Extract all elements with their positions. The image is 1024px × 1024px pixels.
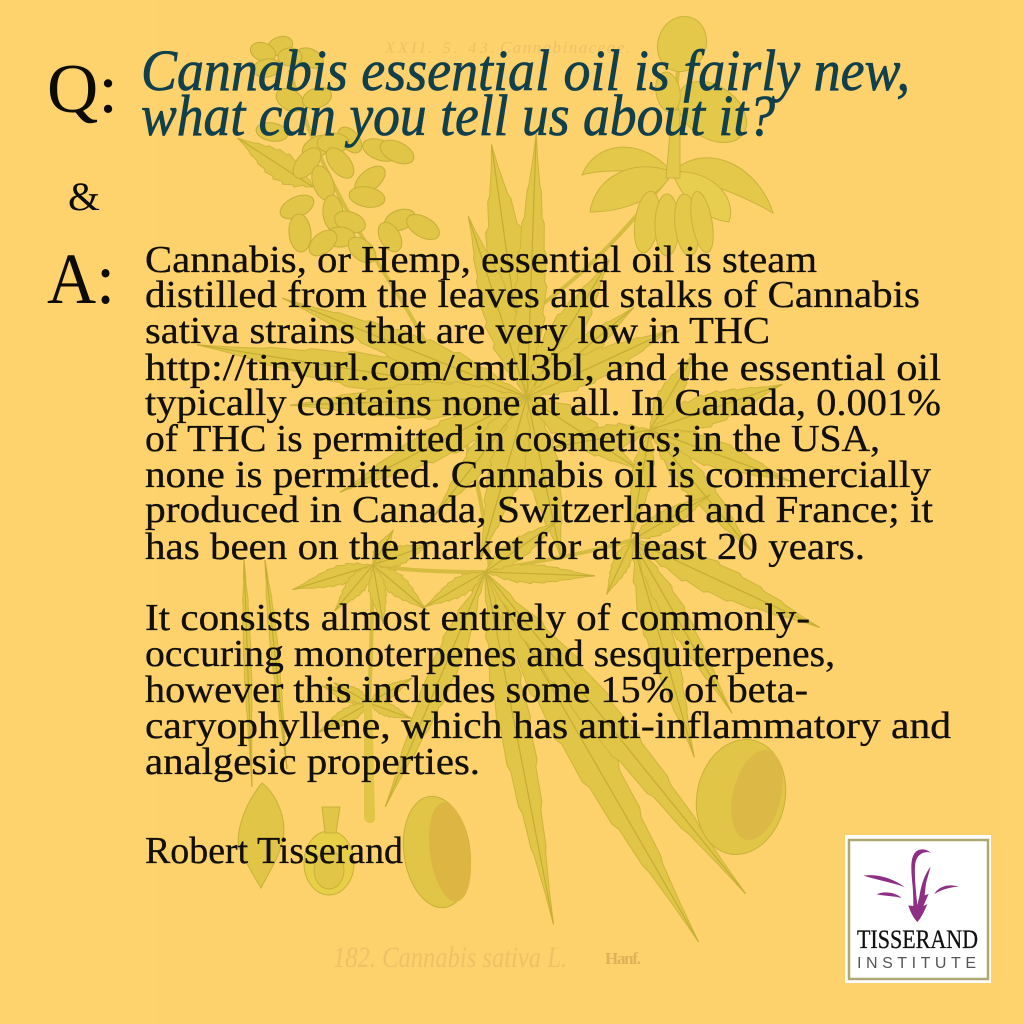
answer paragraph 2: caryophyllene, which has anti-inflammatory and — [145, 705, 951, 747]
plate captions: Hanf. — [605, 949, 641, 968]
answer paragraph 2: It consists almost entirely of commonly- — [145, 597, 810, 639]
plate captions: Cannabinaceae. — [500, 38, 630, 57]
question heading: Cannabis essential oil is fairly new, — [141, 38, 910, 103]
answer paragraph 1: sativa strains that are very low in THC — [145, 310, 770, 352]
question heading — [141, 38, 910, 148]
plant stems — [290, 70, 678, 703]
seeds and bracts — [238, 731, 796, 912]
answer paragraph 1: none is permitted. Cannabis oil is commercially — [145, 454, 931, 496]
answer paragraph 1: of THC is permitted in cosmetics; in the USA, — [145, 418, 880, 460]
answer paragraph 2: occuring monoterpenes and sesquiterpenes, — [145, 633, 835, 675]
answer paragraph 1: Cannabis, or Hemp, essential oil is steam — [145, 239, 817, 281]
answer paragraph 1: produced in Canada, Switzerland and France; it — [145, 489, 933, 531]
Q label: Q: — [47, 51, 118, 128]
bud clusters — [248, 33, 444, 268]
answer paragraph 1: has been on the market for at least 20 years. — [145, 526, 865, 568]
answer paragraph 2: however this includes some 15% of beta- — [145, 669, 808, 711]
ampersand: & — [68, 174, 100, 219]
plate captions — [333, 38, 641, 974]
answer paragraph 2 — [145, 597, 951, 783]
A label: A: — [47, 239, 115, 319]
plate captions: 182. Cannabis sativa L. — [333, 941, 567, 974]
answer paragraph 1: typically contains none at all. In Canada, 0.001% — [145, 382, 941, 424]
icon: purple plant mark — [863, 849, 959, 922]
plate captions: XXII. 5. 43. — [384, 40, 495, 57]
logo subtitle: INSTITUTE — [857, 955, 976, 972]
answer paragraph 2: analgesic properties. — [145, 741, 480, 783]
answer paragraph 1: distilled from the leaves and stalks of Cannabis — [145, 274, 920, 316]
flower at top right — [582, 9, 773, 257]
author name: Robert Tisserand — [145, 830, 403, 872]
logo wordmark: TISSERAND — [857, 925, 978, 954]
logo: Tisserand Institute — [845, 835, 991, 983]
answer paragraph 1: http://tinyurl.com/cmtl3bl, and the essential oil — [145, 347, 941, 389]
answer paragraph 1 — [145, 239, 941, 568]
leaves — [194, 125, 827, 953]
question heading: what can you tell us about it? — [141, 83, 775, 148]
